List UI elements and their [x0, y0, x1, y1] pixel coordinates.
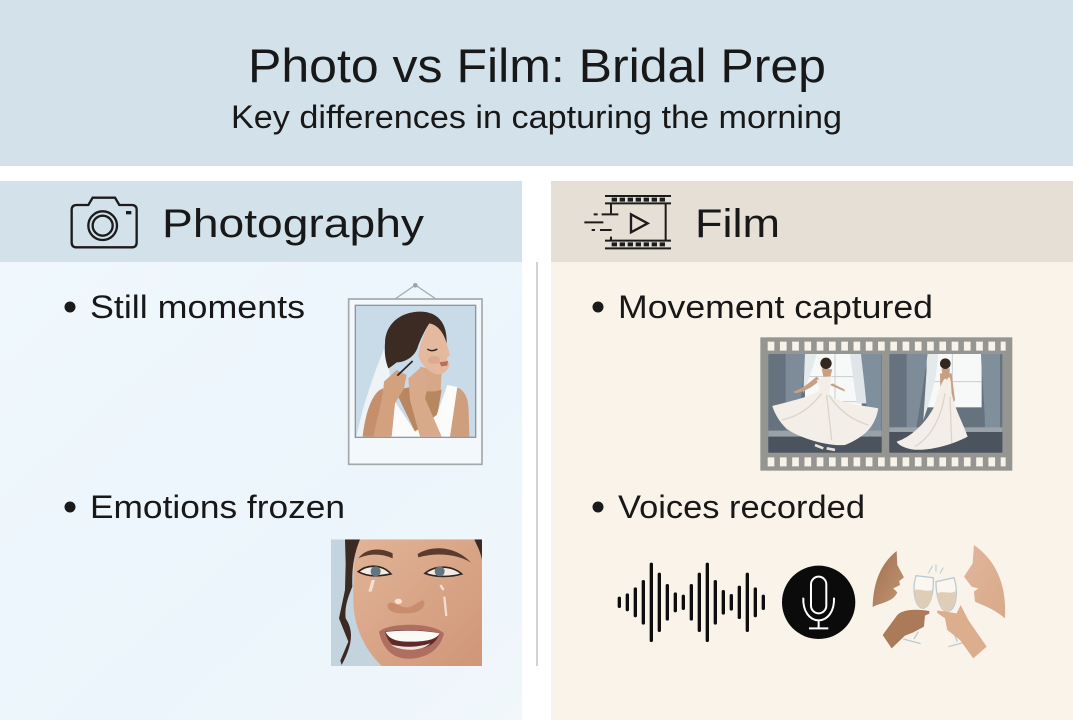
film strip: bride in motion	[760, 337, 1012, 471]
heading: Photography: Photography	[162, 202, 424, 246]
subtitle: Key differences in capturing the morning	[231, 99, 842, 135]
icon: microphone	[782, 566, 855, 639]
heading: Film: Film	[695, 202, 780, 246]
frame 2: from behind	[889, 354, 1002, 453]
header banner	[0, 0, 1073, 166]
illustration: two guests toasting	[873, 545, 1005, 658]
close-up: smiling face with tears	[331, 539, 482, 666]
audio row	[619, 545, 1005, 658]
icon: film strip with play	[584, 196, 671, 248]
bullet: emotions frozen: Emotions frozen	[90, 489, 345, 525]
icon: sound waveform	[619, 564, 763, 640]
bullet: still moments: Still moments	[90, 289, 305, 325]
bullet: voices recorded: Voices recorded	[618, 489, 865, 525]
panel: photography	[0, 181, 522, 720]
title: Photo vs Film: Bridal Prep	[248, 39, 826, 92]
framed portrait: bride fastening earring	[349, 283, 482, 464]
frame 1: twirling	[768, 354, 882, 453]
icon: camera	[72, 198, 137, 247]
bullet: movement captured: Movement captured	[618, 289, 933, 325]
panel: film	[551, 181, 1073, 720]
divider line	[536, 262, 538, 666]
